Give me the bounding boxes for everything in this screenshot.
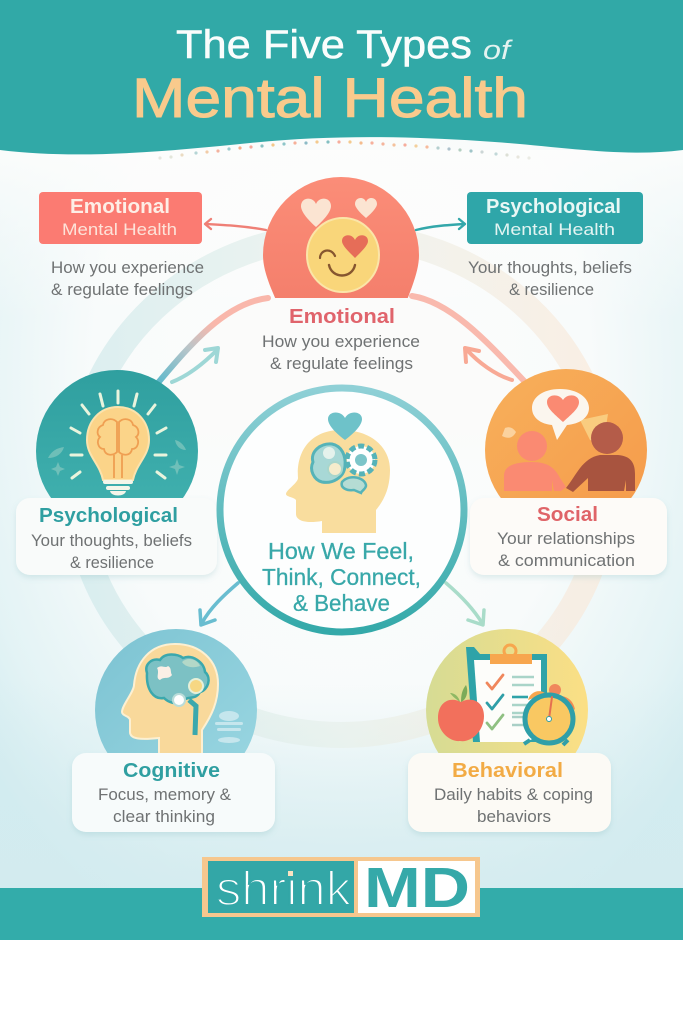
- text: psychological badge description: & resilience: [509, 281, 594, 299]
- text: emotional badge description: How you experience: [51, 259, 204, 277]
- text: emotional description: How you experience: [262, 333, 420, 351]
- arrow: center to behavioral: [446, 583, 484, 625]
- card: social: & communication: [498, 552, 635, 570]
- card: social: Social: [537, 504, 598, 526]
- circle: social background: [485, 369, 647, 531]
- panel: psychological: [16, 370, 217, 575]
- logo: shrinkMD: shrink: [216, 863, 352, 916]
- icon: clipboard with checklist: [466, 645, 547, 742]
- circle: psychological background: [36, 370, 198, 532]
- panel: emotional center card: [157, 296, 527, 470]
- icon: apple: [438, 685, 484, 741]
- header banner: [0, 0, 683, 154]
- logo: shrinkMD: [202, 856, 480, 920]
- card: psychological: Psychological: [39, 505, 178, 527]
- card: cognitive: [72, 753, 275, 832]
- card: behavioral: [408, 753, 611, 832]
- card: psychological: & resilience: [70, 554, 154, 572]
- badge: psychological mental health: Mental Health: [494, 220, 615, 239]
- text: central message: [262, 538, 421, 616]
- title: of: [483, 35, 513, 65]
- title: [132, 23, 528, 129]
- card: psychological: [16, 498, 217, 575]
- arrow: center to cognitive: [200, 583, 238, 625]
- badge: emotional mental health: Mental Health: [62, 220, 177, 239]
- text: central message: & Behave: [293, 590, 390, 616]
- card: cognitive: Cognitive: [123, 760, 220, 782]
- panel: behavioral: [408, 629, 611, 832]
- text: psychological badge description: Your thoughts, beliefs: [468, 259, 632, 277]
- text: central message: Think, Connect,: [262, 564, 421, 590]
- panel: social: [470, 369, 667, 575]
- text: emotional description: & regulate feelings: [270, 355, 413, 373]
- pale connecting ring: [76, 235, 606, 735]
- icon: head with brain: [122, 644, 243, 755]
- title: The Five Types: [176, 23, 472, 67]
- arrow: social to emotional: [465, 348, 512, 380]
- icon: alarm clock: [524, 684, 575, 745]
- heading: emotional center: Emotional: [289, 306, 395, 328]
- panel: central circle: [220, 388, 464, 632]
- circle: behavioral background: [426, 629, 588, 791]
- icon: light bulb with brain: [48, 391, 186, 496]
- badge: emotional mental health: Emotional: [70, 196, 170, 218]
- icon: smiling face: [307, 218, 379, 292]
- circle: cognitive background: [95, 629, 257, 791]
- logo: shrinkMD: MD: [364, 856, 470, 920]
- text: central message: How We Feel,: [268, 538, 414, 564]
- panel: emotional circle: [263, 177, 419, 300]
- card: social: [470, 498, 667, 575]
- card: behavioral: behaviors: [477, 808, 551, 826]
- text: emotional description: [262, 333, 420, 373]
- text: emotional badge description: [51, 259, 204, 299]
- badge: emotional mental health: [39, 192, 202, 244]
- arrow: emotional to badge right: [416, 219, 465, 230]
- arrow: emotional to badge left: [205, 219, 266, 230]
- text: psychological badge description: [468, 259, 632, 299]
- badge: psychological mental health: [467, 192, 643, 244]
- icon: two people talking: [502, 389, 635, 492]
- badge: psychological mental health: Psychological: [486, 196, 621, 218]
- card: social: Your relationships: [497, 530, 635, 548]
- footer band: [0, 888, 683, 940]
- card: psychological: Your thoughts, beliefs: [31, 532, 192, 550]
- arrow: psychological to emotional: [172, 348, 218, 382]
- dotted wave decoration: [158, 140, 531, 160]
- text: emotional badge description: & regulate feelings: [51, 281, 193, 299]
- card: cognitive: clear thinking: [113, 808, 215, 826]
- card: cognitive: Focus, memory &: [98, 786, 231, 804]
- card: behavioral: Behavioral: [452, 760, 563, 782]
- title: Mental Health: [132, 66, 528, 129]
- icon: head with gears: [286, 412, 390, 533]
- icon: floating hearts: [301, 198, 377, 227]
- panel: cognitive: [72, 629, 275, 832]
- card: behavioral: Daily habits & coping: [434, 786, 593, 804]
